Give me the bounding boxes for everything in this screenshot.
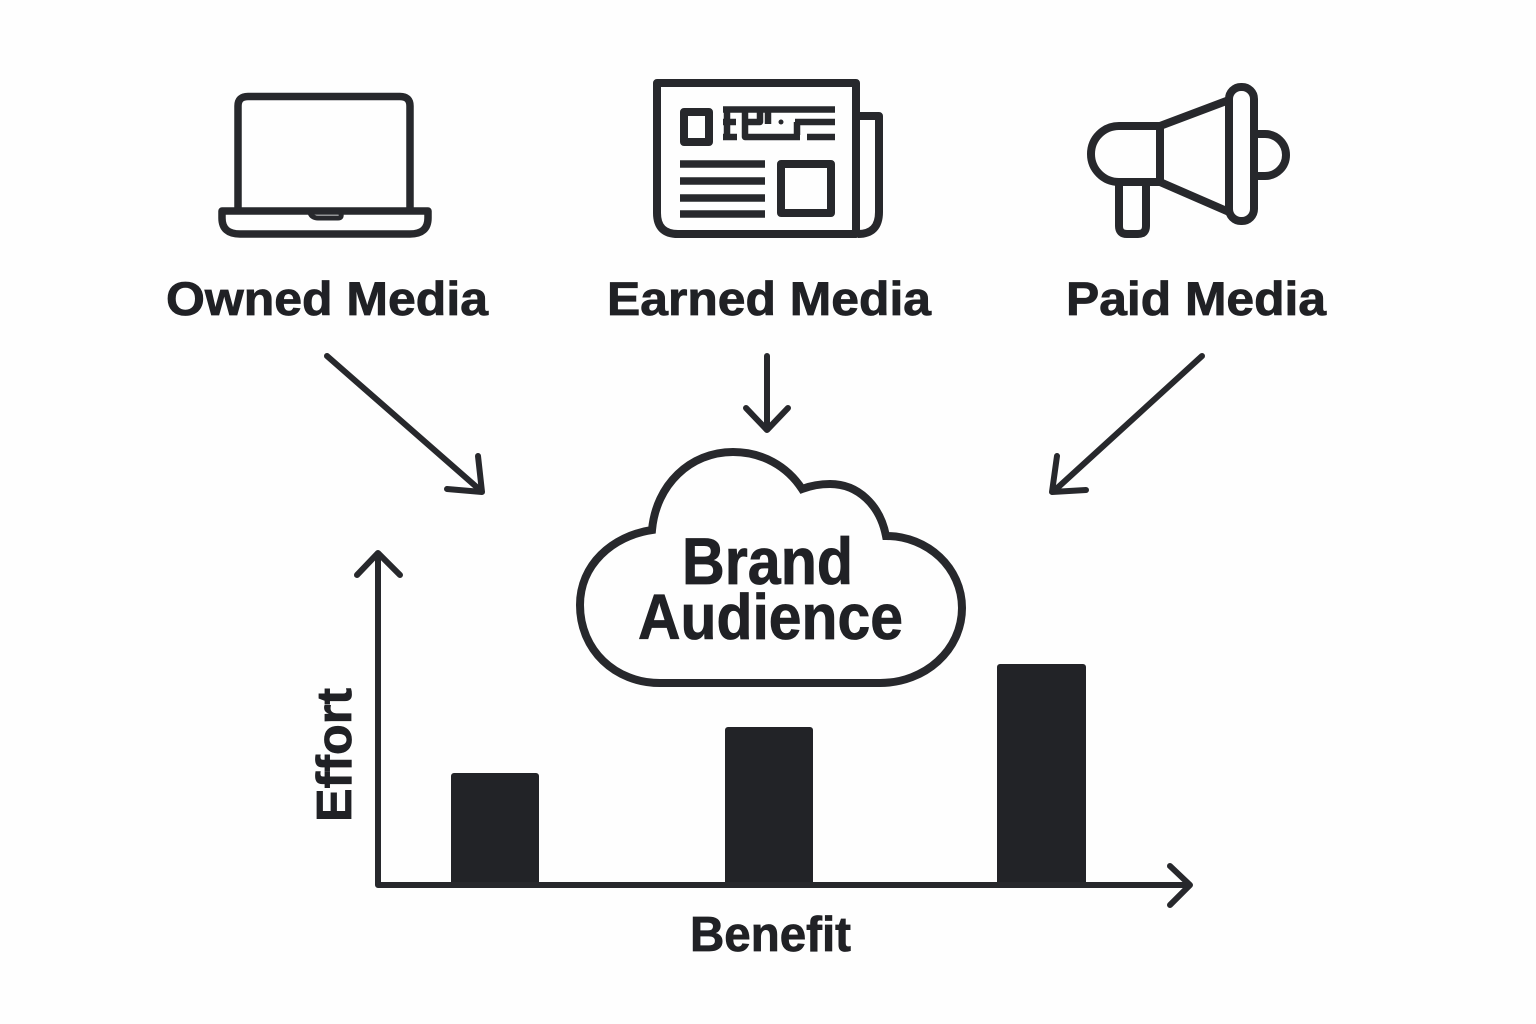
cloud: brand audience bbox=[580, 452, 962, 683]
bar: paid bbox=[997, 664, 1086, 887]
cloud label: Brand: Brand bbox=[682, 524, 853, 598]
icon: megaphone (paid media) bbox=[1091, 87, 1286, 234]
arrow: owned media to brand audience bbox=[327, 356, 482, 492]
icon: laptop (owned media) bbox=[222, 96, 428, 234]
arrow: paid media to brand audience bbox=[1052, 356, 1202, 492]
bar chart: effort versus benefit bbox=[308, 553, 1190, 962]
arrow: earned media to brand audience bbox=[746, 356, 788, 430]
cloud label: Audience: Audience bbox=[638, 581, 903, 653]
axes with arrowheads bbox=[357, 553, 1190, 905]
x axis label: Benefit: Benefit bbox=[690, 908, 851, 962]
bar: owned bbox=[451, 773, 539, 887]
icon: newspaper (earned media) bbox=[657, 83, 879, 234]
heading: Earned Media: Earned Media bbox=[607, 272, 932, 325]
heading: Owned Media: Owned Media bbox=[166, 272, 489, 325]
y axis label: Effort: Effort bbox=[308, 688, 362, 822]
heading: Paid Media: Paid Media bbox=[1066, 272, 1327, 325]
bar: earned bbox=[725, 727, 813, 887]
